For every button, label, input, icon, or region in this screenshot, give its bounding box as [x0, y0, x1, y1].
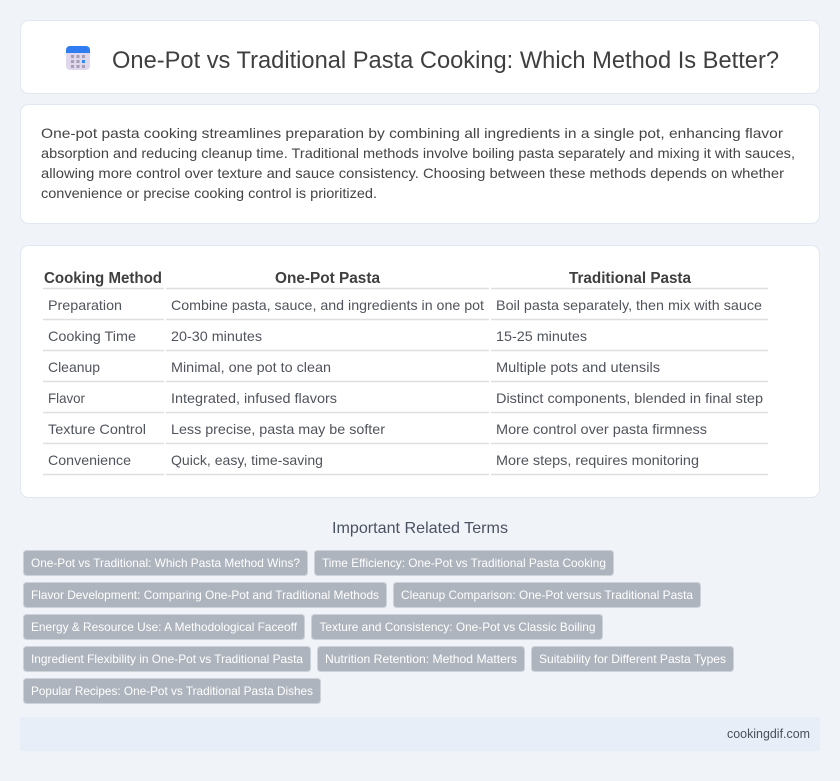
- panel: comparison table: [20, 246, 820, 498]
- row: convenience: Convenience: [48, 452, 131, 468]
- tag: [394, 582, 700, 608]
- row: preparation: Combine pasta, sauce, and ingredients in one pot: [171, 297, 484, 313]
- text block: introduction: [41, 125, 795, 201]
- title: One-Pot vs Traditional Pasta Cooking: Which Method Is Better?: [112, 47, 779, 74]
- text block: introduction: absorption and reducing cleanup time. Traditional methods involve boiling pasta separately and mixing it with sauces,: [41, 145, 795, 161]
- row: preparation: Preparation: [48, 297, 122, 313]
- row: cooking time: [48, 328, 587, 344]
- row: convenience: [48, 452, 699, 468]
- tag: One-Pot vs Traditional: Which Pasta Method Wins?: [31, 556, 300, 570]
- tag: Popular Recipes: One-Pot vs Traditional Pasta Dishes: [31, 684, 313, 698]
- row: texture control: [48, 421, 707, 437]
- tag: Energy & Resource Use: A Methodological Faceoff: [31, 620, 298, 634]
- text block: introduction: One-pot pasta cooking streamlines preparation by combining all ingredients in a single pot, enhancing flavor: [41, 125, 783, 141]
- row: texture control: Less precise, pasta may be softer: [171, 421, 385, 437]
- row: cleanup: Multiple pots and utensils: [496, 359, 660, 375]
- row: flavor: Distinct components, blended in final step: [496, 390, 763, 406]
- tag: [24, 614, 304, 640]
- table header: Cooking Method: [44, 270, 162, 287]
- row: preparation: [48, 297, 762, 313]
- text block: introduction: allowing more control over texture and sauce consistency. Choosing between these methods depends on whether: [41, 165, 784, 181]
- row: cleanup: Minimal, one pot to clean: [171, 359, 331, 375]
- row: cooking time: Cooking Time: [48, 328, 136, 344]
- tag: Ingredient Flexibility in One-Pot vs Traditional Pasta: [31, 652, 303, 666]
- row: texture control: Texture Control: [48, 421, 146, 437]
- row: flavor: Integrated, infused flavors: [171, 390, 337, 406]
- tag: Nutrition Retention: Method Matters: [325, 652, 517, 666]
- tag: Flavor Development: Comparing One-Pot and Traditional Methods: [31, 588, 379, 602]
- row: convenience: Quick, easy, time-saving: [171, 452, 323, 468]
- row: texture control: More control over pasta firmness: [496, 421, 707, 437]
- row: cleanup: [48, 359, 660, 375]
- tag: [24, 550, 308, 576]
- tag: [24, 646, 310, 672]
- table header: Traditional Pasta: [569, 270, 691, 287]
- icon: calendar: [66, 46, 90, 70]
- tag: [532, 646, 734, 672]
- heading: related terms: Important Related Terms: [332, 520, 508, 537]
- table header: One-Pot Pasta: [275, 270, 380, 287]
- panel: header: [20, 20, 820, 94]
- table header: [44, 270, 691, 287]
- footer: [20, 717, 820, 751]
- row: convenience: More steps, requires monitoring: [496, 452, 699, 468]
- tag: [312, 614, 602, 640]
- text block: introduction: convenience or precise cooking control is prioritized.: [41, 185, 377, 201]
- tag: [314, 550, 614, 576]
- tag: [24, 678, 320, 704]
- tag: [24, 582, 386, 608]
- related term tags: [24, 550, 734, 704]
- tag: Cleanup Comparison: One-Pot versus Traditional Pasta: [401, 588, 693, 602]
- row: cleanup: Cleanup: [48, 359, 100, 375]
- row: cooking time: 15-25 minutes: [496, 328, 587, 344]
- tag: [318, 646, 524, 672]
- row: cooking time: 20-30 minutes: [171, 328, 262, 344]
- footer: source: cookingdif.com: [727, 727, 810, 741]
- tag: Time Efficiency: One-Pot vs Traditional Pasta Cooking: [322, 556, 606, 570]
- row: flavor: Flavor: [48, 390, 85, 406]
- tag: Texture and Consistency: One-Pot vs Classic Boiling: [320, 620, 596, 634]
- tag: Suitability for Different Pasta Types: [539, 652, 726, 666]
- row: preparation: Boil pasta separately, then mix with sauce: [496, 297, 762, 313]
- panel: introduction: [20, 104, 820, 224]
- row: flavor: [48, 390, 763, 406]
